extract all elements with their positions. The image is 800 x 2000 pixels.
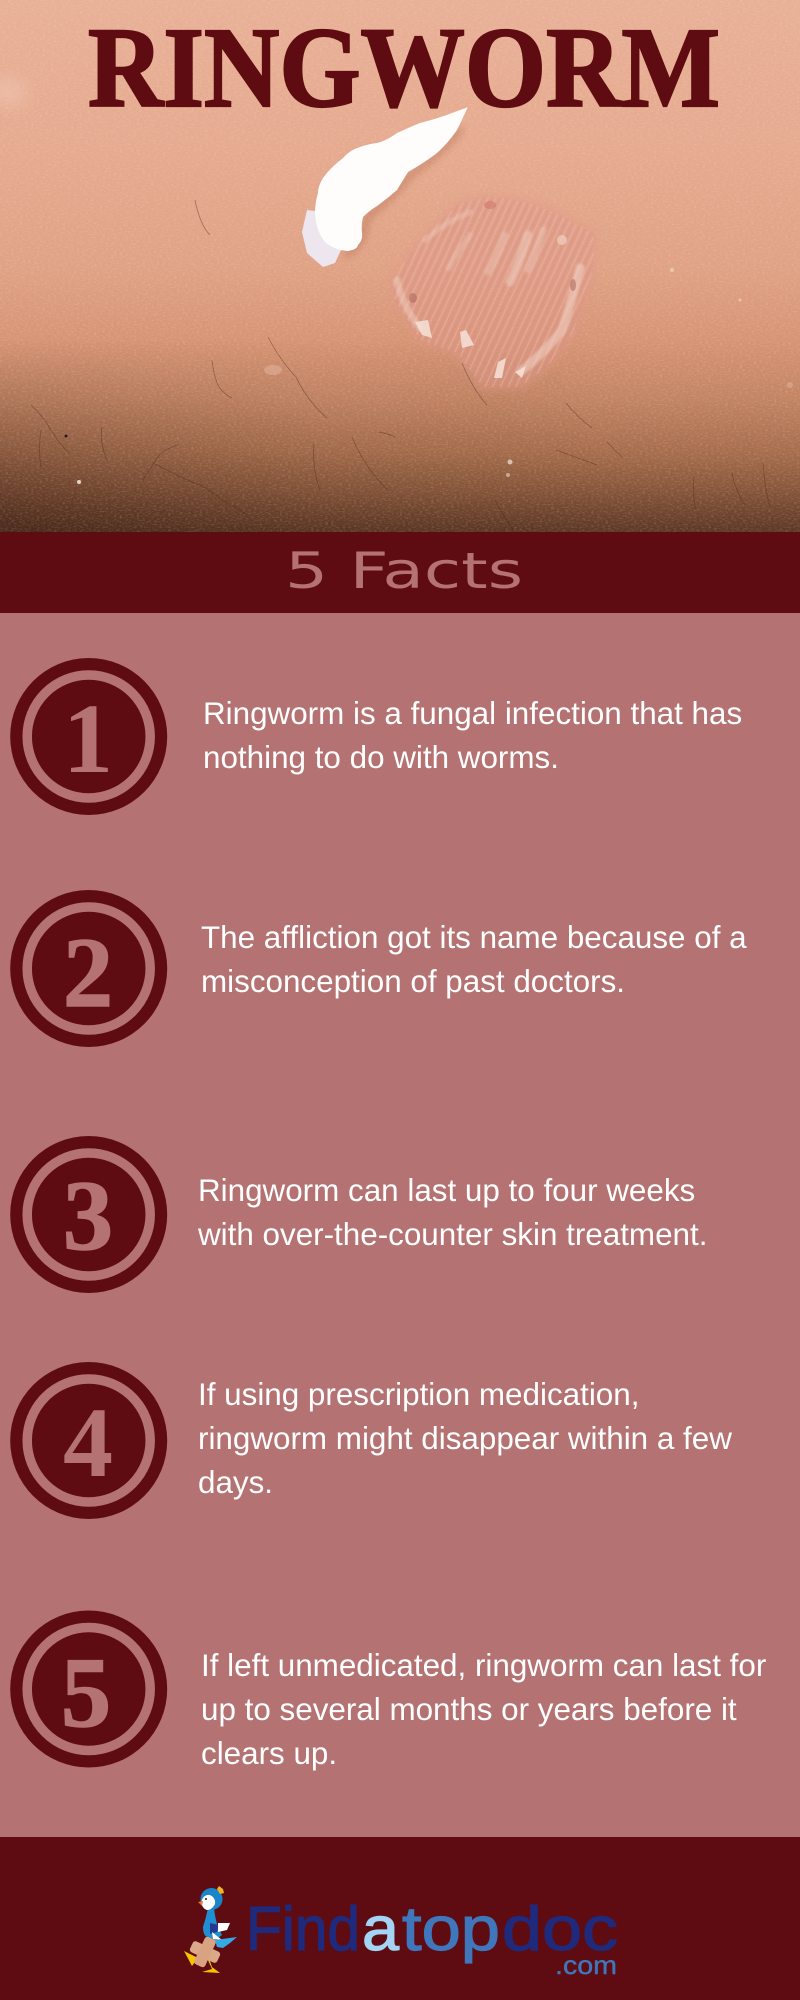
fact 4 text: If using prescription medication, <box>198 1377 639 1412</box>
logo wordmark: top <box>402 1895 500 1964</box>
number badge 4 <box>10 1362 167 1519</box>
fact 4 text: ringworm might disappear within a few <box>198 1421 732 1456</box>
fact 2 <box>10 890 747 1047</box>
number badge 1: 1 <box>63 683 113 794</box>
fact 1 <box>10 658 742 815</box>
number badge 5: 5 <box>61 1637 111 1748</box>
number badge 4: 4 <box>63 1387 113 1498</box>
fact 2 text: misconception of past doctors. <box>201 964 625 999</box>
logo wordmark: Find <box>246 1895 360 1964</box>
title: RINGWORM <box>88 4 720 131</box>
fact 2 text: The affliction got its name because of a <box>201 920 747 955</box>
number badge 3 <box>10 1136 167 1293</box>
logo wordmark <box>246 1895 618 1980</box>
photo: skin with ringworm rash and cream <box>0 0 800 532</box>
logo wordmark: a <box>362 1895 400 1964</box>
rash lesion <box>393 196 594 390</box>
fact 1 text: Ringworm is a fungal infection that has <box>203 696 742 731</box>
fact 5 text: up to several months or years before it <box>201 1692 737 1727</box>
fact 5 <box>10 1610 766 1771</box>
fact 3 <box>10 1136 707 1293</box>
cream shadow <box>345 128 462 255</box>
logo wordmark: doc <box>502 1895 618 1964</box>
icon: duck mascot with bandage <box>184 1886 237 1973</box>
fact 1 text: nothing to do with worms. <box>203 740 559 775</box>
fact 5 text: If left unmedicated, ringworm can last for <box>201 1648 766 1683</box>
subtitle text: 5 Facts <box>285 542 523 600</box>
number badge 5 <box>10 1610 167 1768</box>
cream dollop <box>302 107 468 267</box>
body hair and skin specks <box>31 200 770 530</box>
fact 3 text: with over-the-counter skin treatment. <box>197 1217 707 1252</box>
fact 3 text: Ringworm can last up to four weeks <box>198 1173 695 1208</box>
subtitle band <box>0 532 800 613</box>
number badge 3: 3 <box>63 1160 113 1271</box>
skin flakes <box>397 212 580 372</box>
logo wordmark: .com <box>555 1950 617 1980</box>
number badge 2 <box>10 890 167 1047</box>
number badge 2: 2 <box>63 917 113 1028</box>
number badge 1 <box>10 658 167 815</box>
fact 4 <box>10 1362 732 1519</box>
fact 5 text: clears up. <box>201 1736 337 1771</box>
footer band <box>0 1837 800 2000</box>
fact 4 text: days. <box>198 1465 273 1500</box>
